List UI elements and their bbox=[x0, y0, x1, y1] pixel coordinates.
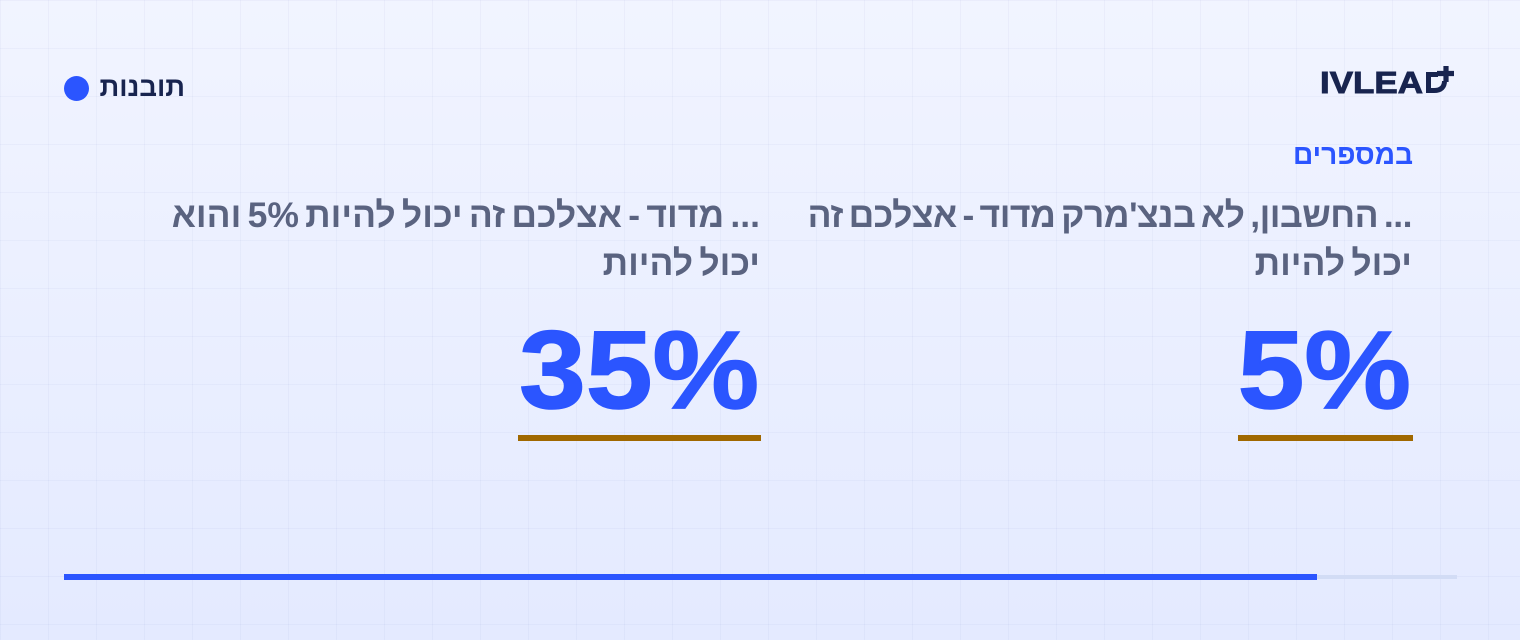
stat description: ... מדוד - אצלכם זה יכול להיות 5% והוא bbox=[172, 195, 760, 235]
stat number: 35% bbox=[519, 309, 759, 432]
panel: stat 35% bbox=[172, 195, 761, 441]
badge text: תובנות bbox=[99, 71, 185, 102]
eyebrow: in numbers: במספרים bbox=[1293, 139, 1413, 170]
panel: stat 5% bbox=[808, 195, 1413, 441]
icon: blue dot bbox=[64, 76, 89, 101]
stat description: יכול להיות bbox=[603, 243, 760, 283]
badge: insights label bbox=[64, 71, 185, 102]
stat number: 5% bbox=[1238, 309, 1411, 432]
stat underline bbox=[1238, 435, 1413, 441]
stat description bbox=[808, 195, 1412, 283]
stat description: יכול להיות bbox=[1255, 243, 1412, 283]
logo: IVLEAD+: IVLEA bbox=[1320, 65, 1423, 100]
stat description bbox=[172, 195, 760, 283]
stat description: ... החשבון, לא בנצ'מרק מדוד - אצלכם זה bbox=[808, 195, 1412, 235]
progress bar bbox=[64, 574, 1457, 580]
logo: IVLEAD+ bbox=[1320, 65, 1454, 100]
stat underline bbox=[518, 435, 761, 441]
